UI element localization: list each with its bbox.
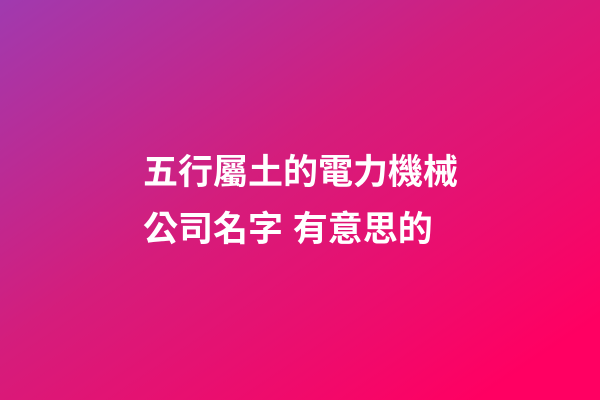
title [143,153,458,249]
title: 五行屬土的電力機械 [143,153,458,192]
title: 公司名字 有意思的 [143,210,433,249]
